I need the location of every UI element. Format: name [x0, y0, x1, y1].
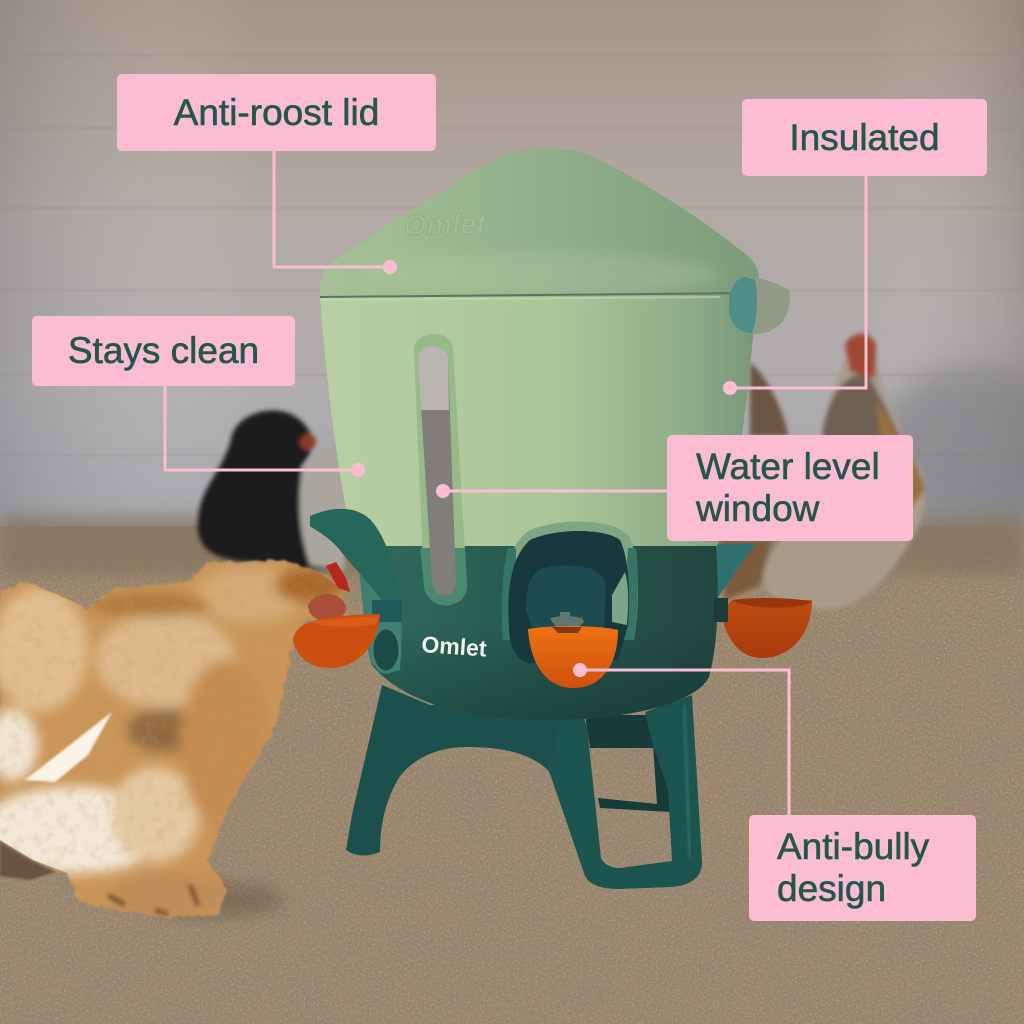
- label: Anti-bully design: [749, 815, 976, 921]
- side strap: right: [712, 543, 756, 600]
- side strap and bracket: left: [310, 509, 402, 672]
- label: Stays clean: [32, 316, 295, 386]
- feeder base: dark green bowl: Omlet: [421, 631, 488, 662]
- water cup: right: [714, 598, 812, 658]
- label: Water level window: window: [696, 488, 819, 529]
- label: Anti-roost lid: [117, 74, 436, 151]
- foreground hen: golden: [0, 555, 350, 925]
- label: Water level window: Water level: [696, 446, 880, 487]
- leader line: insulated: [730, 175, 866, 388]
- water cup: centre: [528, 626, 618, 688]
- background hen: brown right: [720, 334, 925, 609]
- leader line: water level window: [443, 490, 670, 492]
- label: Stays clean: Stays clean: [68, 330, 259, 371]
- water level window: [414, 334, 467, 605]
- label: Insulated: Insulated: [789, 116, 940, 158]
- feeder lid: anti-roost cone: Omlet: [404, 209, 488, 242]
- background: coop wall: [0, 0, 1024, 535]
- marker dots: [351, 260, 737, 677]
- leader line: anti-roost lid: [274, 150, 390, 267]
- label: Anti-roost lid: Anti-roost lid: [174, 92, 379, 132]
- leader line: stays clean: [165, 385, 358, 470]
- water cup: left, hen drinking: [293, 614, 380, 668]
- feeder tank: light green body: [320, 294, 757, 548]
- feeder rear leg and crossbar: [585, 715, 671, 812]
- background: sandy floor: [0, 515, 1024, 1024]
- label: Anti-bully design: design: [777, 868, 886, 909]
- lid latch: [729, 277, 790, 334]
- label: Anti-bully design: Anti-bully: [777, 826, 929, 867]
- drinking alcove: centre: [502, 522, 638, 663]
- feeder base: dark green bowl: [369, 546, 718, 720]
- feeder lid: anti-roost cone: [320, 149, 759, 300]
- label: Insulated: [742, 99, 987, 176]
- label: Water level window: [667, 435, 913, 541]
- leader line: anti-bully design: [580, 670, 789, 816]
- background hen: black: [198, 411, 345, 570]
- feeder legs: [346, 685, 702, 889]
